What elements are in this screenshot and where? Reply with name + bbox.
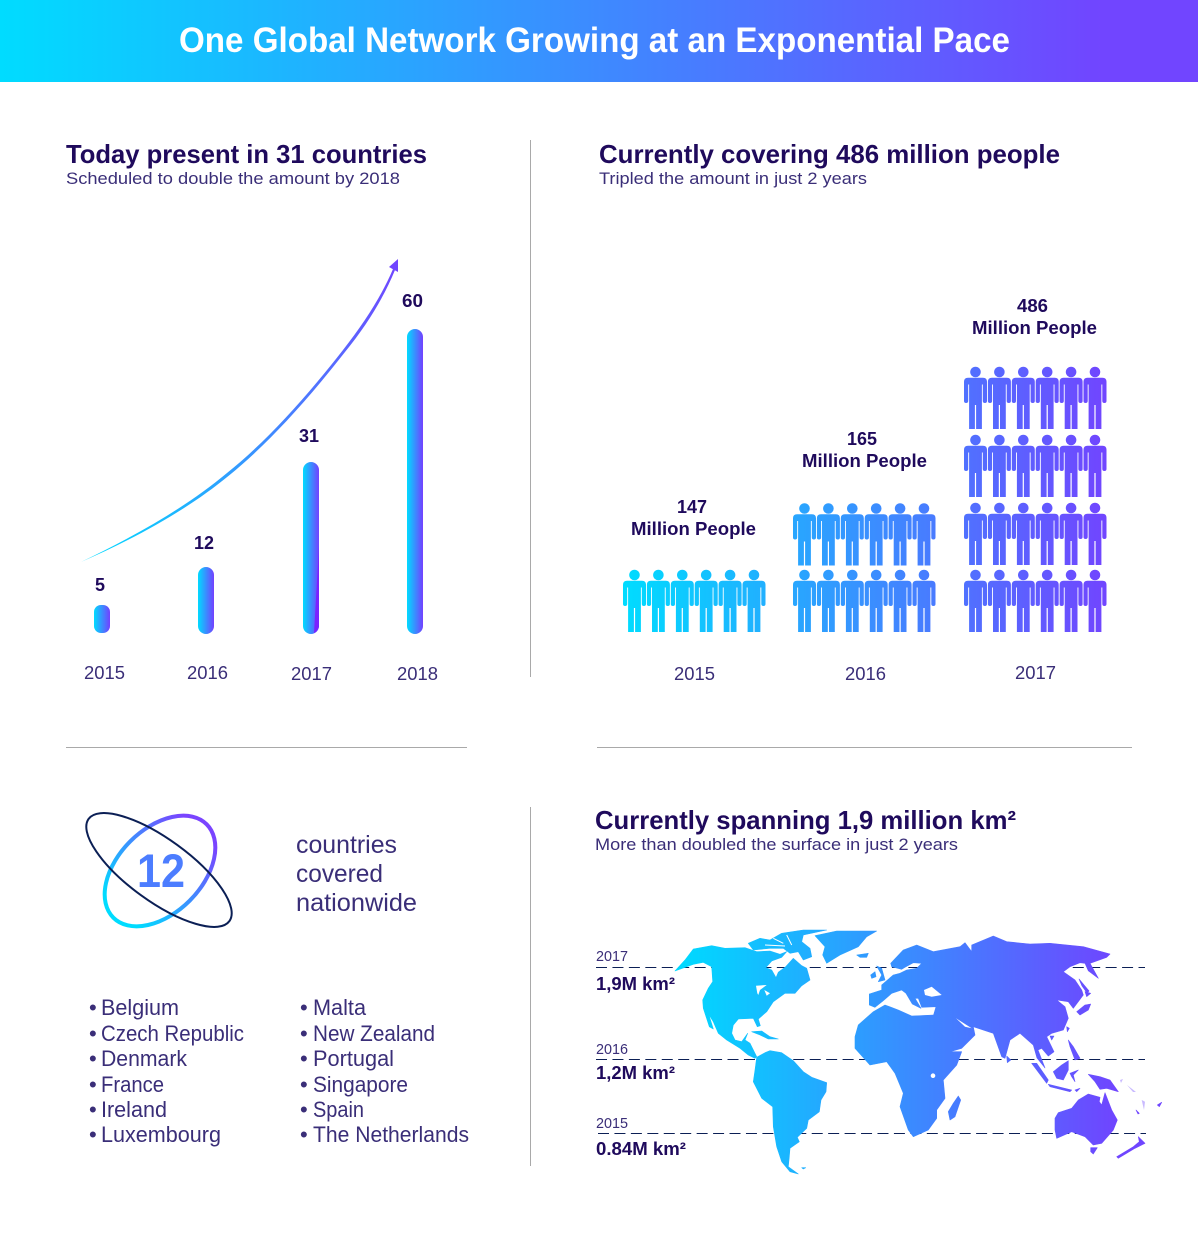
bar chart: countries per year bbox=[84, 291, 438, 684]
title: One Global Network Growing at an Exponential Pace bbox=[179, 21, 1010, 60]
arrow: growth curve bbox=[81, 259, 398, 562]
Falkland Islands bbox=[802, 1168, 806, 1169]
list: countries right: Spain bbox=[313, 1097, 364, 1122]
New Zealand bbox=[1117, 1137, 1145, 1158]
list: countries right: New Zealand bbox=[313, 1021, 435, 1046]
list: countries right: Portugal bbox=[313, 1046, 394, 1071]
dashed level lines bbox=[596, 968, 1146, 1134]
list: countries left: Belgium bbox=[101, 995, 179, 1020]
label: 2015 people: 147 bbox=[677, 497, 707, 517]
label: 2015 people bbox=[631, 497, 756, 684]
list: countries right: • bbox=[300, 1046, 308, 1071]
Greenland bbox=[815, 931, 877, 963]
list: countries right: The Netherlands bbox=[313, 1122, 469, 1147]
Java bbox=[1048, 1084, 1072, 1092]
South America bbox=[753, 1051, 827, 1174]
panel: countries growth bbox=[66, 139, 438, 684]
subheading: people: Tripled the amount in just 2 years bbox=[599, 169, 867, 188]
list: countries right: Malta bbox=[313, 995, 367, 1020]
icon: orbit 12 bbox=[70, 794, 248, 947]
Hainan bbox=[1050, 1036, 1054, 1040]
map label: 2015: 0.84M km² bbox=[596, 1139, 686, 1159]
heading: surface: Currently spanning 1,9 million km² bbox=[595, 805, 1016, 835]
New Guinea bbox=[1088, 1074, 1118, 1092]
heading: people: Currently covering 486 million people bbox=[599, 139, 1060, 169]
map label: 2016: 2016 bbox=[596, 1041, 628, 1058]
map label: 2016: 1,2M km² bbox=[596, 1063, 675, 1083]
pictogram: people rows bbox=[620, 360, 1110, 635]
label: 2017 people: 486 bbox=[1017, 296, 1048, 316]
New Caledonia bbox=[1136, 1110, 1139, 1114]
label: 2016 people: 2016 bbox=[845, 664, 886, 684]
list: countries left bbox=[89, 995, 244, 1147]
bar chart: countries per year: 2017 bbox=[291, 664, 332, 684]
label: 2016 people: 165 bbox=[847, 429, 877, 449]
bar chart: countries per year: 5 bbox=[95, 575, 105, 595]
icon: orbit 12: 12 bbox=[137, 844, 185, 897]
label: 2016 people: Million People bbox=[802, 451, 927, 471]
panel: people covered bbox=[599, 139, 1110, 684]
list: countries left: • bbox=[89, 1021, 97, 1046]
Eurasia bbox=[869, 936, 1110, 1068]
list: countries right: • bbox=[300, 1021, 308, 1046]
list: countries left: • bbox=[89, 995, 97, 1020]
map label: 2017: 2017 bbox=[596, 948, 628, 965]
Australia bbox=[1055, 1093, 1117, 1145]
map label: 2016 bbox=[596, 1041, 675, 1083]
bar chart: countries per year: 2016 bbox=[187, 663, 228, 683]
text: countries covered nationwide bbox=[296, 831, 417, 917]
text: countries covered nationwide: covered bbox=[296, 860, 383, 888]
Timor bbox=[1075, 1088, 1080, 1092]
list: countries left: • bbox=[89, 1046, 97, 1071]
Hokkaido bbox=[1085, 992, 1091, 997]
label: 2017 people bbox=[972, 296, 1097, 683]
label: 2015 people: Million People bbox=[631, 519, 756, 539]
list: countries left: • bbox=[89, 1072, 97, 1097]
label: 2016 people bbox=[802, 429, 927, 684]
map label: 2017: 1,9M km² bbox=[596, 974, 675, 994]
list: countries left: Denmark bbox=[101, 1046, 188, 1071]
text: countries covered nationwide: countries bbox=[296, 831, 397, 859]
label: 2015 people: 2015 bbox=[674, 664, 715, 684]
Japan bbox=[1077, 1004, 1091, 1015]
panel: surface map bbox=[595, 805, 1162, 1174]
list: countries right: • bbox=[300, 995, 308, 1020]
Madagascar bbox=[948, 1096, 961, 1120]
map label: 2017 bbox=[596, 948, 675, 994]
Tasmania bbox=[1091, 1148, 1097, 1154]
bar chart: countries per year: 12 bbox=[194, 533, 214, 553]
list: countries left: France bbox=[101, 1072, 164, 1097]
Philippines bbox=[1068, 1040, 1080, 1060]
list: countries right: • bbox=[300, 1122, 308, 1147]
text: countries covered nationwide: nationwide bbox=[296, 889, 417, 917]
panel: nationwide countries bbox=[70, 794, 469, 1147]
heading: countries: Today present in 31 countries bbox=[66, 139, 427, 169]
label: 2017 people: 2017 bbox=[1015, 663, 1056, 683]
Taiwan bbox=[1067, 1027, 1069, 1032]
bar chart: countries per year: 2018 bbox=[397, 664, 438, 684]
list: countries right: • bbox=[300, 1072, 308, 1097]
map label: 2015: 2015 bbox=[596, 1115, 628, 1132]
header banner bbox=[0, 0, 1198, 82]
subheading: surface: More than doubled the surface in just 2 years bbox=[595, 835, 958, 854]
list: countries right bbox=[300, 995, 469, 1147]
list: countries left: • bbox=[89, 1097, 97, 1122]
map label: 2015 bbox=[596, 1115, 686, 1159]
list: countries right: • bbox=[300, 1097, 308, 1122]
Borneo bbox=[1053, 1061, 1068, 1080]
list: countries left: • bbox=[89, 1122, 97, 1147]
Britain bbox=[877, 966, 885, 982]
label: 2017 people: Million People bbox=[972, 318, 1097, 338]
Sakhalin bbox=[1079, 979, 1089, 993]
Sri Lanka bbox=[1007, 1056, 1011, 1063]
Arctic islands bbox=[748, 930, 827, 960]
bar chart: countries per year: 31 bbox=[299, 426, 319, 446]
list: countries right: Singapore bbox=[313, 1072, 408, 1097]
Africa bbox=[855, 1005, 962, 1137]
list: countries left: Czech Republic bbox=[101, 1021, 244, 1046]
Sulawesi bbox=[1070, 1070, 1078, 1082]
Sumatra bbox=[1032, 1063, 1048, 1083]
subheading: countries: Scheduled to double the amount by 2018 bbox=[66, 169, 400, 188]
bar chart: countries per year: 60 bbox=[402, 291, 423, 311]
bar chart: countries per year: 2015 bbox=[84, 663, 125, 683]
Iceland bbox=[857, 953, 868, 957]
Fiji bbox=[1157, 1102, 1162, 1107]
Cuba bbox=[752, 1031, 778, 1039]
world map bbox=[675, 930, 1162, 1174]
list: countries left: Ireland bbox=[101, 1097, 167, 1122]
Ireland bbox=[871, 972, 876, 978]
list: countries left: Luxembourg bbox=[101, 1122, 221, 1147]
North America bbox=[675, 946, 810, 1058]
